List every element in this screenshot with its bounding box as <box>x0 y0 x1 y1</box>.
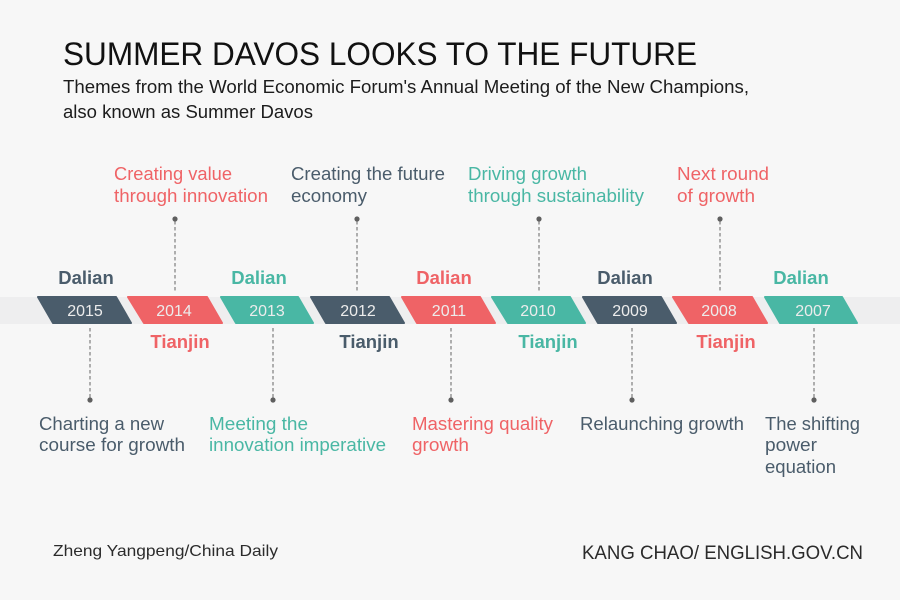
subtitle: Themes from the World Economic Forum's Annual Meeting of the New Champions, <box>63 77 749 97</box>
milestone 2010: through sustainability <box>468 186 644 206</box>
milestone 2015: course for growth <box>39 435 185 455</box>
milestone 2015: Charting a new <box>39 414 165 434</box>
milestone 2011: Dalian <box>416 267 472 288</box>
milestone 2007: The shifting <box>765 414 860 434</box>
milestone 2015 <box>38 267 185 455</box>
milestone 2015: 2015 <box>67 303 103 320</box>
milestone 2010: Tianjin <box>518 331 578 352</box>
milestone 2007 <box>765 267 860 477</box>
milestone 2009: Dalian <box>597 267 653 288</box>
milestone 2009: 2009 <box>612 303 648 320</box>
milestone 2011: growth <box>412 435 469 455</box>
milestone 2012: Creating the future <box>291 164 445 184</box>
milestone 2008: Next round <box>677 164 769 184</box>
milestone 2010: 2010 <box>520 303 556 320</box>
milestone 2008: of growth <box>677 186 755 206</box>
milestone 2013: Dalian <box>231 267 287 288</box>
milestone 2013: 2013 <box>249 303 285 320</box>
credit: designer: Zheng Yangpeng/China Daily <box>53 543 278 560</box>
milestone 2007: Dalian <box>773 267 829 288</box>
milestone 2007: equation <box>765 457 836 477</box>
milestone 2014: through innovation <box>114 186 268 206</box>
milestone 2011 <box>402 267 553 455</box>
milestone 2014 <box>114 164 268 352</box>
milestone 2008: Tianjin <box>696 331 756 352</box>
milestone 2015: Dalian <box>58 267 114 288</box>
milestone 2013: Meeting the <box>209 414 308 434</box>
milestone 2014: Tianjin <box>150 331 210 352</box>
milestone 2008 <box>673 164 769 352</box>
milestone 2010: Driving growth <box>468 164 587 184</box>
subtitle: also known as Summer Davos <box>63 102 313 122</box>
credit: source: KANG CHAO/ ENGLISH.GOV.CN <box>582 543 863 564</box>
milestone 2014: Creating value <box>114 164 232 184</box>
milestone 2012: 2012 <box>340 303 376 320</box>
title: SUMMER DAVOS LOOKS TO THE FUTURE <box>63 36 697 72</box>
milestone 2011: Mastering quality <box>412 414 553 434</box>
milestone 2013: innovation imperative <box>209 435 386 455</box>
milestone 2012 <box>291 164 445 352</box>
milestone 2012: economy <box>291 186 367 206</box>
milestone 2014: 2014 <box>156 303 192 320</box>
milestone 2009: Relaunching growth <box>580 414 744 434</box>
milestone 2010 <box>468 164 644 352</box>
subtitle <box>63 77 749 122</box>
milestone 2013 <box>209 267 386 455</box>
timeline band <box>0 297 900 324</box>
milestone 2007: 2007 <box>795 303 831 320</box>
milestone 2007: power <box>765 435 817 455</box>
milestone 2011: 2011 <box>432 303 466 320</box>
milestone 2008: 2008 <box>701 303 737 320</box>
milestone 2009 <box>580 267 744 434</box>
milestone 2012: Tianjin <box>339 331 399 352</box>
